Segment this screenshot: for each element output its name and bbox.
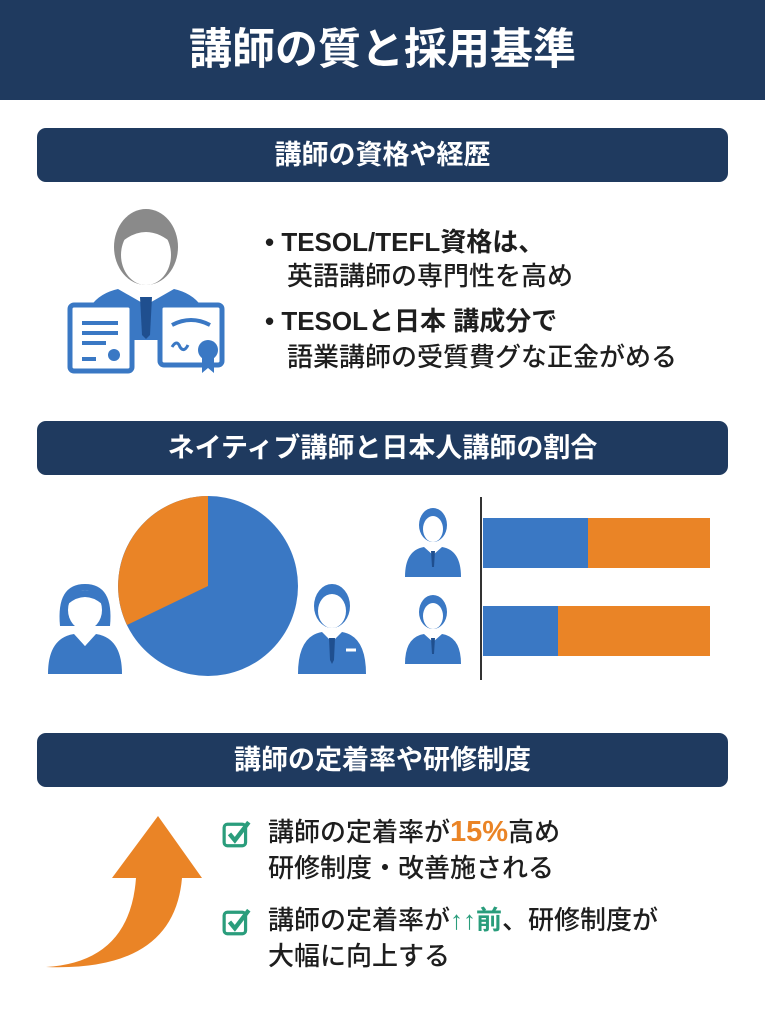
checklist: 講師の定着率が↑↑前、研修制度が xyxy=(268,905,658,935)
bullet text: qualifications: 英語講師の専門性を高め xyxy=(287,261,573,291)
pie chart xyxy=(118,496,298,676)
icon: person row 2 xyxy=(405,595,461,664)
bullet text: qualifications: • TESOL/TEFL資格は、 xyxy=(265,227,544,257)
icon: check 1 xyxy=(222,820,250,848)
bullet text: qualifications: 語業講師の受質費グな正金がめる xyxy=(287,342,677,372)
checklist: 研修制度・改善施される xyxy=(268,853,554,883)
heading: qualifications: 講師の資格や経歴 xyxy=(274,140,490,170)
checklist xyxy=(222,816,658,971)
icon: male teacher xyxy=(298,584,366,674)
heading: ratio xyxy=(37,421,728,475)
checklist: 大幅に向上する xyxy=(268,941,450,971)
title xyxy=(0,0,765,100)
heading: qualifications xyxy=(37,128,728,182)
heading: ratio: ネイティブ講師と日本人講師の割合 xyxy=(168,433,597,463)
icon: check 2 xyxy=(222,908,250,936)
heading: retention xyxy=(37,733,728,787)
title: 講師の質と採用基準 xyxy=(189,26,576,74)
bar chart xyxy=(405,497,710,680)
checklist: 講師の定着率が15%高め xyxy=(268,816,560,848)
icon: teacher with certificates xyxy=(68,209,224,374)
bullet text: qualifications: • TESOLと日本 講成分で xyxy=(265,306,557,336)
heading: retention: 講師の定着率や研修制度 xyxy=(234,745,531,775)
icon: female teacher xyxy=(48,584,122,674)
icon: person row 1 xyxy=(405,508,461,577)
bullet text: qualifications xyxy=(265,227,677,372)
icon: orange up arrow xyxy=(46,816,202,968)
